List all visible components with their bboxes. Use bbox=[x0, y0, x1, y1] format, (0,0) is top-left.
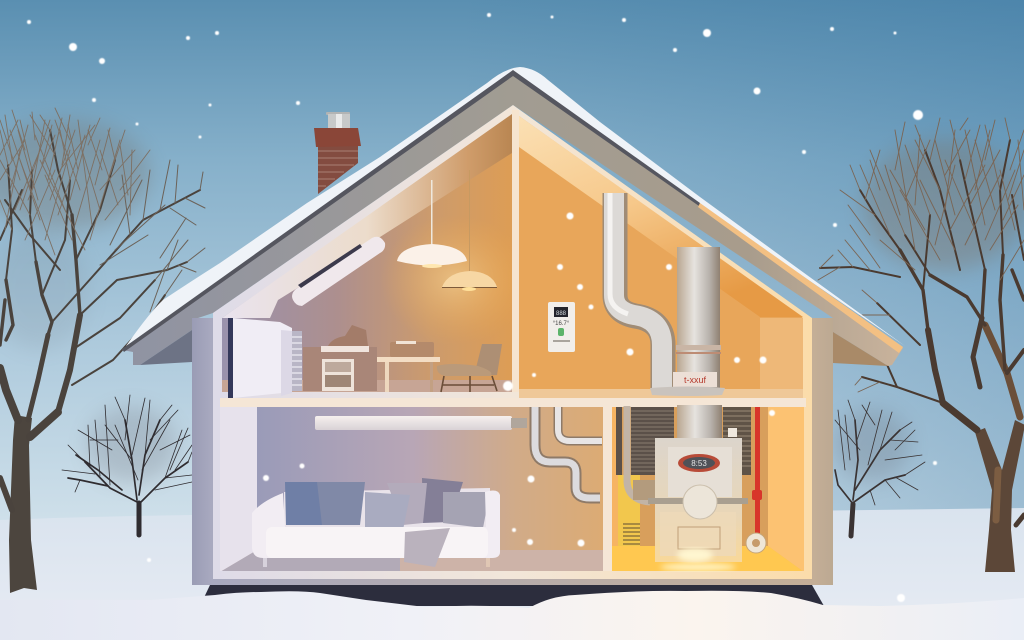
floors and divider bbox=[213, 398, 812, 579]
thermostat: 888 bbox=[556, 311, 567, 317]
roof overhang bbox=[122, 67, 905, 366]
large bare tree right bbox=[818, 118, 1024, 572]
pendant lamp two bbox=[442, 170, 497, 291]
panel: upper right room bbox=[519, 116, 803, 398]
red gas pipe and valve bbox=[746, 407, 766, 553]
roof snow bbox=[126, 67, 905, 346]
flue collar label bbox=[673, 372, 717, 387]
central divider upper bbox=[512, 110, 519, 392]
small bare tree right bbox=[834, 400, 925, 536]
back cushions bbox=[284, 488, 490, 530]
furnace side pipe bbox=[627, 406, 650, 502]
floor vent bbox=[623, 524, 640, 544]
pendant lamp one bbox=[397, 180, 467, 268]
white supply pipe lower room bbox=[315, 416, 527, 430]
left soffit bbox=[140, 330, 192, 365]
sofa frame bbox=[252, 491, 500, 558]
foreground snow mounds bbox=[0, 591, 1024, 640]
flue lower bbox=[677, 405, 722, 438]
table bbox=[377, 341, 440, 392]
curved duct bbox=[615, 193, 663, 388]
panel: lower left room bbox=[220, 405, 603, 572]
chimney bbox=[314, 112, 361, 194]
roof band bbox=[122, 71, 903, 366]
furnace body bbox=[655, 438, 742, 562]
flue and ducts upper right bbox=[610, 193, 725, 396]
right soffit bbox=[833, 332, 888, 366]
shadow under house bbox=[200, 585, 824, 606]
main flue bbox=[677, 247, 720, 392]
furnace bbox=[616, 405, 751, 571]
furnace display bbox=[678, 454, 720, 472]
small bare tree left bbox=[62, 395, 192, 535]
duct bends lower room bbox=[535, 407, 602, 498]
cabinet and furniture bbox=[303, 325, 377, 391]
panel: upper left room bbox=[222, 114, 530, 392]
panel: lower right furnace room bbox=[612, 405, 804, 572]
chair bbox=[437, 344, 502, 392]
white cut frame bbox=[213, 105, 812, 578]
snowy ground bbox=[0, 508, 1024, 640]
left side ac wall duct bbox=[292, 237, 385, 306]
thermostat bbox=[548, 302, 575, 352]
flue and ducts upper right: t-xxuf bbox=[684, 375, 706, 385]
thermostat: °16.7° bbox=[553, 321, 570, 327]
house outer walls bbox=[192, 318, 833, 585]
outdoor unit cabinet bbox=[228, 318, 302, 398]
large bare tree left bbox=[0, 108, 205, 593]
manifold rods bbox=[648, 498, 748, 504]
furnace display: 8:53 bbox=[691, 459, 707, 468]
throw blanket bbox=[404, 528, 450, 567]
sofa bbox=[252, 478, 500, 567]
rear vent louvers bbox=[631, 407, 674, 475]
